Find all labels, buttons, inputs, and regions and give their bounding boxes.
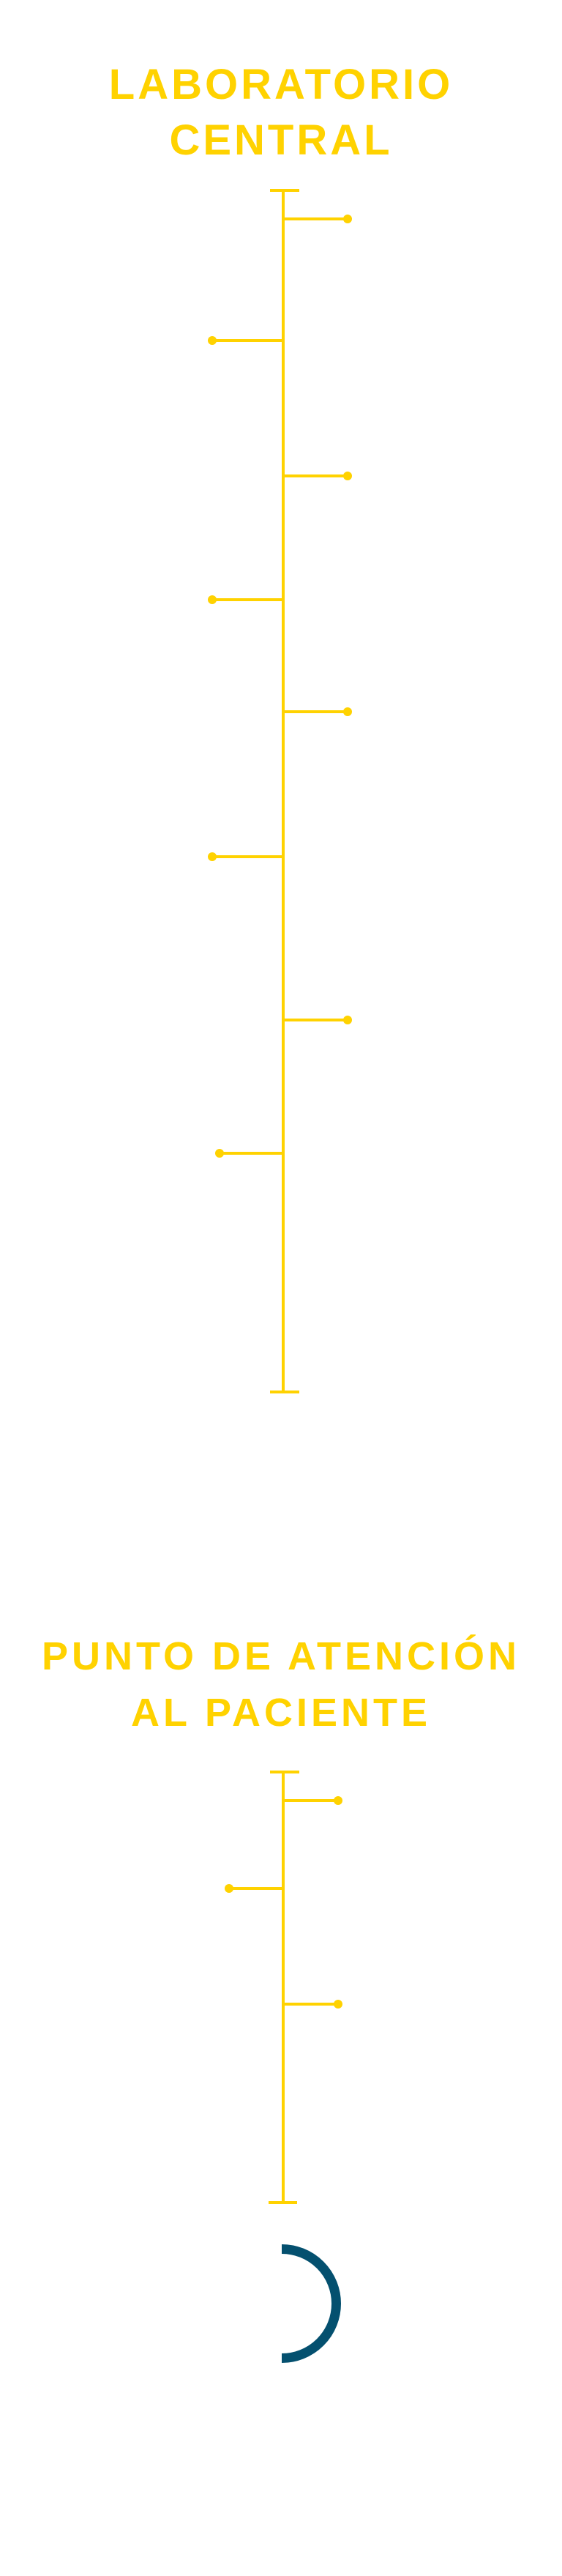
title: punto de atención al paciente: AL PACIENTE bbox=[131, 1691, 431, 1735]
title: laboratorio central bbox=[109, 61, 453, 164]
title: laboratorio central: CENTRAL bbox=[169, 116, 393, 164]
blue half-circle arc bbox=[282, 2249, 337, 2358]
title: punto de atención al paciente bbox=[42, 1634, 520, 1735]
title: punto de atención al paciente: PUNTO DE ATENCIÓN bbox=[42, 1634, 520, 1678]
timeline: laboratorio central bbox=[208, 190, 352, 1392]
title: laboratorio central: LABORATORIO bbox=[109, 61, 453, 108]
timeline: punto de atención bbox=[225, 1772, 342, 2203]
